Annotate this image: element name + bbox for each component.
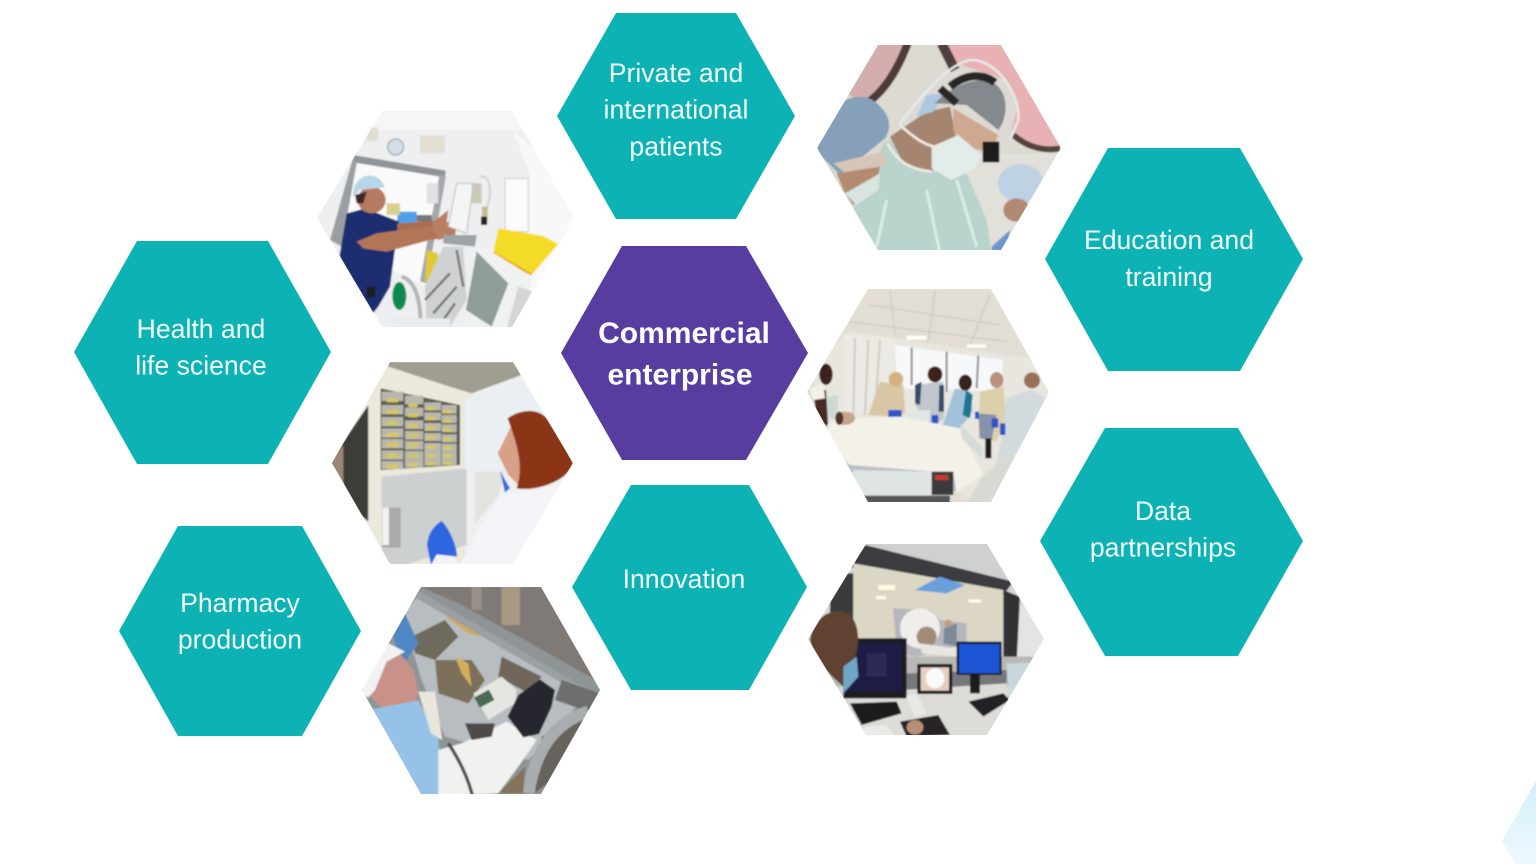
hexagon: Pharmacy production: Pharmacy (180, 588, 301, 618)
hexagon: Education and training: Education and (1084, 225, 1254, 255)
corner decoration (1502, 781, 1536, 864)
hexagon: Pharmacy production (119, 526, 361, 736)
hexagon: Health and life science: life science (135, 351, 267, 381)
photo: students around simulation patient (800, 285, 1055, 508)
hexagon: Private and international patients (557, 13, 795, 219)
hexagon: Education and training (1045, 148, 1303, 371)
photo: scientist at storage freezer (332, 362, 573, 564)
hexagon: Commercial enterprise: Commercial (598, 317, 770, 350)
hexagon: Health and life science: Health and (137, 314, 265, 344)
hexagon: Data partnerships: Data (1135, 496, 1191, 526)
photo: MRI control room (800, 540, 1050, 740)
hexagon: Private and international patients: international (604, 95, 748, 125)
hexagon: Pharmacy production: production (178, 625, 302, 655)
photo: clinician at anaesthesia machine (317, 111, 559, 327)
hexagon: Health and life science (74, 241, 331, 464)
hexagon: Commercial enterprise: enterprise (607, 358, 753, 392)
hexagon: Commercial enterprise (561, 246, 808, 460)
hexagon: Private and international patients: Private and (609, 58, 743, 88)
photo: surgeon with head loupes (810, 40, 1065, 255)
hexagon: Private and international patients: patients (629, 131, 723, 161)
hexagon: Data partnerships (1040, 428, 1303, 656)
photo: technician at isolator glove box (362, 587, 600, 794)
hexagon: Innovation: Innovation (623, 564, 745, 594)
hexagon: Data partnerships: partnerships (1090, 533, 1236, 563)
hexagon: Education and training: training (1125, 262, 1213, 292)
hexagon: Innovation (572, 485, 807, 690)
